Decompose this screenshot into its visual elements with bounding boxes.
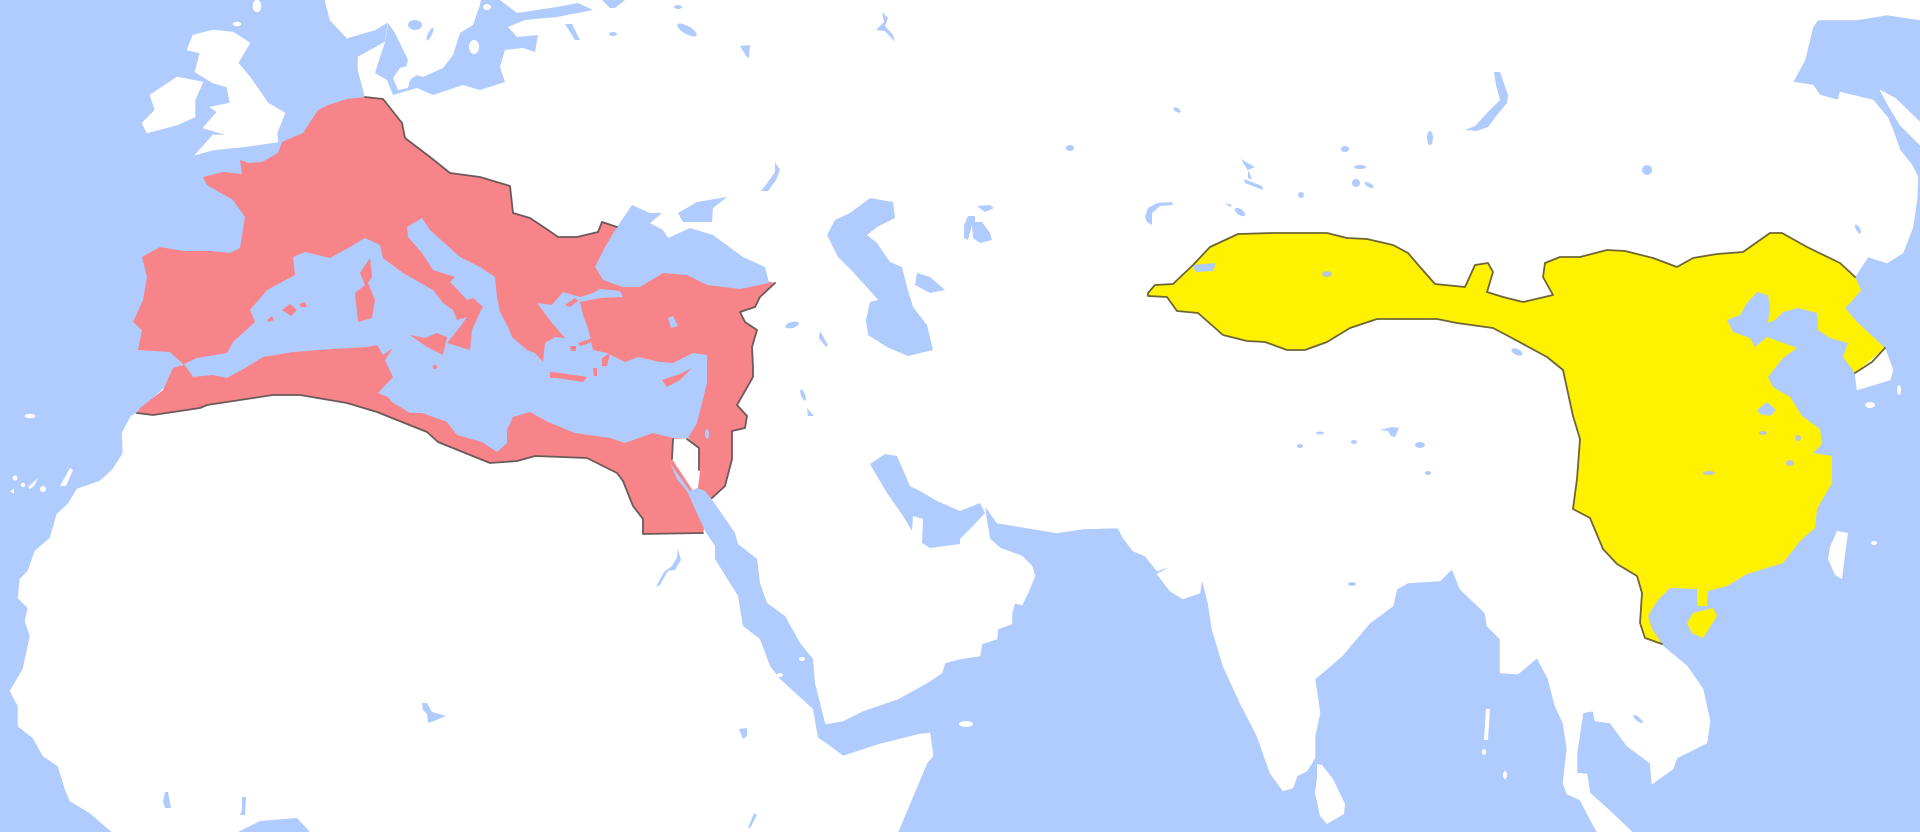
Britain [187,30,285,155]
Roman inner lakes [668,316,709,439]
Han frontier line [1148,233,1885,644]
European and Russian lakes [408,0,895,416]
southern Korea [1855,348,1893,390]
Andaman Islands [1482,709,1507,779]
Sicily [410,333,447,355]
lakes inside Han territory [1192,263,1801,475]
Corsica and Sardinia [355,258,375,322]
Persian Gulf [870,454,985,548]
Mediterranean islands and Aegean [267,258,692,387]
Caspian Sea [827,198,933,356]
Sakhalin [1880,90,1920,145]
Sinai peninsula [672,438,700,491]
Lake Baikal [1465,72,1508,131]
Gulf of Guinea [238,818,310,832]
Baltic islands [393,4,528,90]
Roman frontier line [137,97,775,534]
Red Sea islands [777,657,805,677]
Taiwan [1828,531,1848,579]
African lakes [163,549,757,832]
Canary Islands [10,468,73,494]
Balearic islands [267,302,307,322]
Baltic Sea [375,0,593,95]
Roman Empire territory [133,97,775,534]
Black Sea [595,205,769,289]
small northern islands [25,0,261,418]
Sri Lanka [1315,764,1345,824]
Tibetan lakes [1297,427,1644,724]
Red Sea [670,463,831,738]
Han Dynasty territory [1148,233,1885,644]
Garabogaz Gulf [915,273,945,293]
Aegean islands [565,298,610,376]
Hainan island [1687,608,1717,638]
Sea of Azov [678,197,727,222]
Jeju and Tsushima [1865,385,1901,408]
Malta [433,365,437,369]
Socotra [959,721,973,727]
Aral Sea [964,216,992,243]
Atlantic and Indian Ocean islands [10,385,1901,824]
Lake Balkhash [1145,202,1173,225]
Cyprus [662,368,692,387]
Mediterranean Sea [184,218,707,452]
Ireland [142,77,203,133]
Crete [550,372,587,382]
